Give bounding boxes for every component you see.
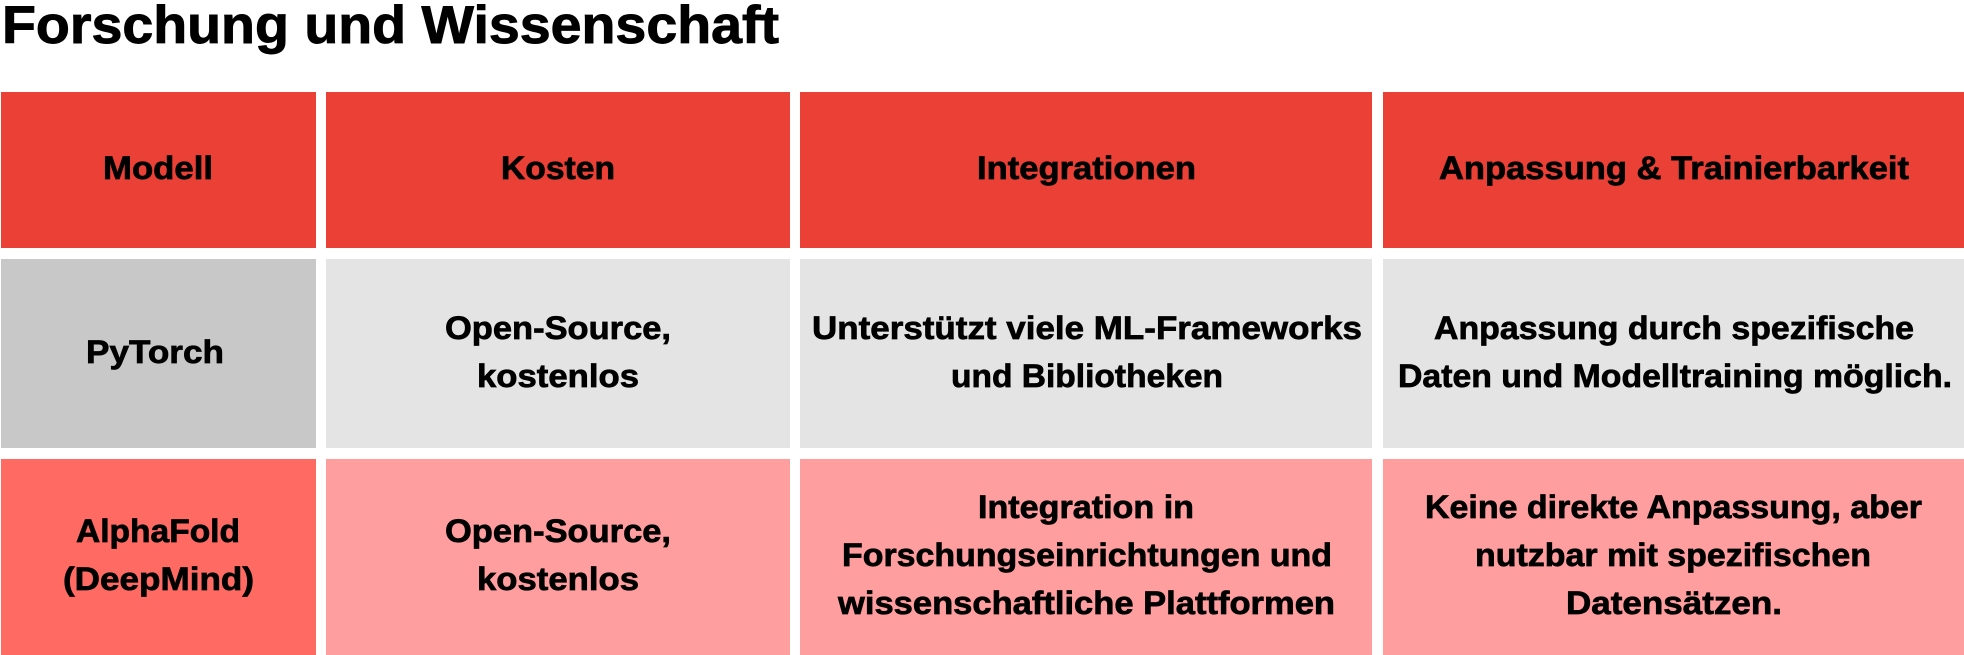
cell: PyTorch cost (326, 259, 790, 448)
cell: AlphaFold model: AlphaFold (76, 513, 240, 549)
header cell: Integrationen (800, 92, 1372, 248)
cell: AlphaFold customization: Datensätzen. (1566, 585, 1782, 621)
cell: AlphaFold cost: kostenlos (477, 561, 639, 597)
cell: PyTorch cost: kostenlos (477, 358, 639, 394)
cell: PyTorch model: PyTorch (86, 334, 224, 370)
header row (1, 92, 1964, 248)
cell: PyTorch customization: Daten und Modelltraining möglich. (1398, 358, 1952, 394)
cell: AlphaFold integrations (800, 459, 1372, 655)
cell: AlphaFold integrations: wissenschaftliche Plattformen (837, 585, 1335, 621)
cell: AlphaFold cost (326, 459, 790, 655)
cell: AlphaFold integrations: Forschungseinrichtungen und (842, 537, 1332, 573)
cell: AlphaFold customization: nutzbar mit spezifischen (1475, 537, 1871, 573)
cell: AlphaFold customization (1383, 459, 1964, 655)
header cell: Modell: Modell (103, 150, 213, 186)
cell: AlphaFold cost: Open-Source, (445, 513, 671, 549)
header cell: Anpassung und Trainierbarkeit: Anpassung & Trainierbarkeit (1439, 150, 1909, 186)
cell: PyTorch integrations: Unterstützt viele ML-Frameworks (812, 310, 1362, 346)
cell: PyTorch customization (1383, 259, 1964, 448)
row: AlphaFold (1, 459, 1964, 655)
cell: AlphaFold customization: Keine direkte Anpassung, aber (1425, 489, 1922, 525)
cell: AlphaFold integrations: Integration in (978, 489, 1194, 525)
header cell: Integrationen: Integrationen (977, 150, 1196, 186)
cell: PyTorch model (1, 259, 316, 448)
header cell: Kosten (326, 92, 790, 248)
cell: AlphaFold model (1, 459, 316, 655)
cell: AlphaFold model: (DeepMind) (63, 561, 254, 597)
cell: PyTorch customization: Anpassung durch spezifische (1434, 310, 1914, 346)
header cell: Anpassung und Trainierbarkeit (1383, 92, 1964, 248)
header cell: Modell (1, 92, 316, 248)
row: PyTorch (1, 259, 1964, 448)
header cell: Kosten: Kosten (501, 150, 615, 186)
cell: PyTorch integrations (800, 259, 1372, 448)
cell: PyTorch cost: Open-Source, (445, 310, 671, 346)
cell: PyTorch integrations: und Bibliotheken (951, 358, 1223, 394)
